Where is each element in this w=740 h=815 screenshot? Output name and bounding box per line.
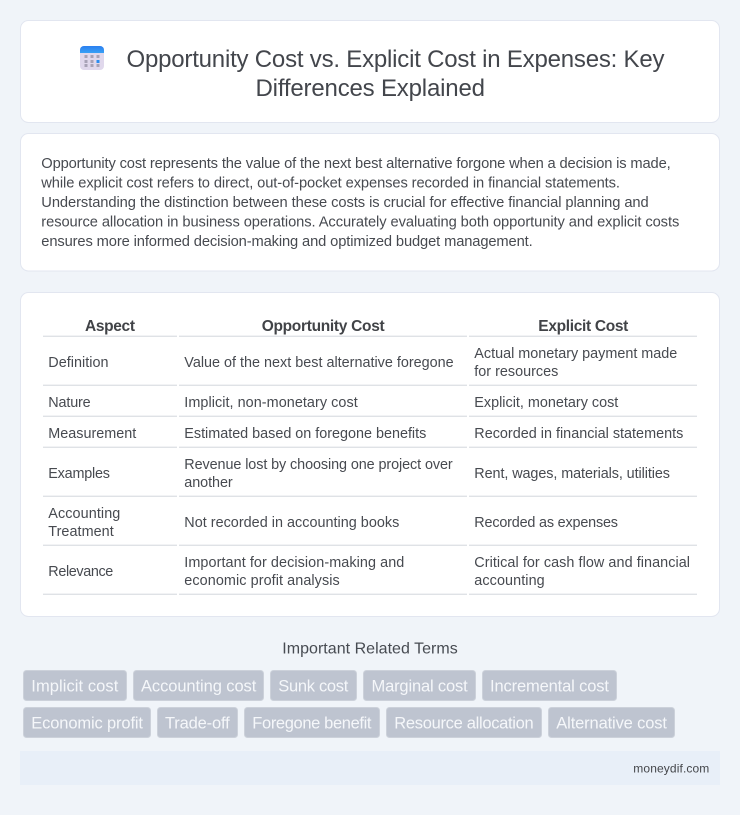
row: examples: Rent, wages, materials, utilities: [474, 466, 670, 482]
row: examples: another: [184, 475, 233, 491]
tag: resource allocation: [386, 708, 542, 738]
row: examples: Examples: [48, 466, 110, 482]
tag: marginal cost: Marginal cost: [372, 677, 468, 695]
title: Opportunity Cost vs. Explicit Cost in Expenses: Key: [126, 46, 664, 73]
tag: implicit cost: Implicit cost: [31, 677, 119, 695]
panel: comparison table: [20, 292, 720, 616]
tag list: related terms: [24, 670, 674, 738]
text block: introduction paragraph: Understanding the distinction between these costs is crucial for effective financial planning and: [41, 195, 649, 211]
tag: implicit cost: [24, 670, 126, 700]
row: relevance: economic profit analysis: [184, 573, 340, 589]
tag: resource allocation: Resource allocation: [394, 714, 534, 732]
table header row: Aspect: [85, 318, 135, 335]
tag: trade-off: [158, 708, 238, 738]
text block: introduction paragraph: [40, 156, 679, 250]
footer: moneydif.com: [633, 761, 709, 775]
table header row: Explicit Cost: [538, 318, 628, 335]
row: nature: [48, 395, 618, 411]
heading: important related terms: Important Related Terms: [282, 640, 458, 657]
tag: sunk cost: [270, 670, 356, 700]
tag: foregone benefit: [244, 708, 380, 738]
row: measurement: [48, 426, 683, 442]
row: relevance: Relevance: [48, 564, 113, 580]
icon: calendar: [80, 46, 104, 70]
row: measurement: Measurement: [48, 426, 136, 442]
row: accounting treatment: Recorded as expenses: [474, 515, 618, 531]
text block: introduction paragraph: Opportunity cost represents the value of the next best alternative forgone when a decision is made,: [41, 156, 671, 172]
tag: sunk cost: Sunk cost: [278, 677, 349, 695]
row: nature: Explicit, monetary cost: [474, 395, 618, 411]
row: nature: Nature: [48, 395, 91, 411]
tag: accounting cost: [134, 670, 264, 700]
row: accounting treatment: Treatment: [48, 524, 114, 540]
row: definition: Definition: [48, 355, 108, 371]
row: measurement: Recorded in financial statements: [474, 426, 683, 442]
row: accounting treatment: Accounting: [48, 506, 120, 522]
row: accounting treatment: [48, 506, 618, 540]
table header row: Opportunity Cost: [262, 318, 385, 335]
panel: header: [20, 20, 720, 122]
tag: incremental cost: Incremental cost: [490, 677, 609, 695]
footer: [20, 751, 720, 785]
row: definition: Actual monetary payment made: [474, 346, 677, 362]
text block: introduction paragraph: ensures more informed decision-making and optimized budget management.: [41, 234, 533, 250]
tag: alternative cost: [548, 708, 674, 738]
tag: alternative cost: Alternative cost: [556, 714, 667, 732]
text block: introduction paragraph: while explicit cost refers to direct, out-of-pocket expenses recorded in financial statements.: [40, 176, 620, 192]
tag: trade-off: Trade-off: [165, 714, 230, 732]
row: relevance: [48, 555, 690, 589]
tag: economic profit: [24, 708, 150, 738]
panel: introduction: [20, 134, 720, 271]
tag: accounting cost: Accounting cost: [141, 677, 257, 695]
row: definition: for resources: [474, 364, 558, 380]
row: relevance: accounting: [474, 573, 545, 589]
tag: incremental cost: [482, 670, 616, 700]
row: relevance: Critical for cash flow and financial: [474, 555, 690, 571]
row: examples: Revenue lost by choosing one project over: [184, 457, 453, 473]
title: Differences Explained: [256, 75, 485, 102]
row: examples: [48, 457, 670, 491]
tag: economic profit: Economic profit: [31, 714, 143, 732]
text block: introduction paragraph: resource allocation in business operations. Accurately evaluating both opportunity and explicit costs: [41, 214, 679, 230]
row: relevance: Important for decision-making and: [184, 555, 404, 571]
title: [126, 46, 664, 102]
row: definition: Value of the next best alternative foregone: [184, 355, 454, 371]
row: accounting treatment: Not recorded in accounting books: [184, 515, 399, 531]
tag: marginal cost: [364, 670, 476, 700]
row: definition: [48, 346, 677, 380]
tag: foregone benefit: Foregone benefit: [252, 714, 372, 732]
table header row: [85, 318, 628, 335]
row: measurement: Estimated based on foregone benefits: [184, 426, 426, 442]
row: nature: Implicit, non-monetary cost: [184, 395, 358, 411]
